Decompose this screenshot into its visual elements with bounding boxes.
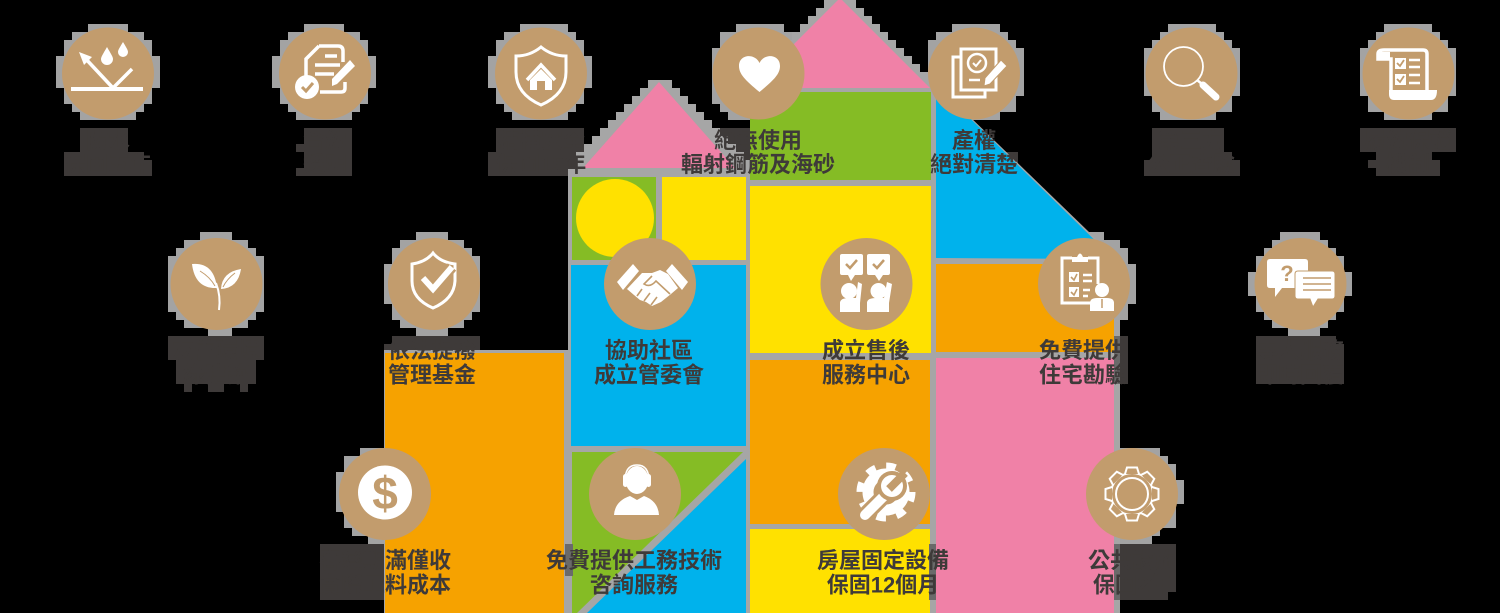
text backing blocks on the dark background	[64, 128, 1456, 600]
icon: headset agent	[614, 465, 659, 515]
caption: structure warranty: 保固15年	[496, 152, 586, 177]
dimmed text shadows in mortar gaps	[565, 336, 1120, 600]
caption: home inspection: 免費提供	[1039, 338, 1127, 363]
caption: inspection: 公正查驗	[1147, 152, 1235, 177]
icon: handshake	[617, 264, 688, 306]
caption: engineering consulting: 咨詢服務	[590, 572, 678, 598]
caption: waterproofing: 保固五年	[64, 152, 152, 177]
tan icon discs	[62, 28, 1454, 540]
caption: contract: 合約	[303, 128, 347, 153]
caption: home inspection: 住宅勘驗	[1039, 362, 1127, 388]
caption: performance guarantee: 履約保證	[1364, 128, 1452, 153]
blue triangle block	[587, 459, 746, 613]
icon: dollar coin	[358, 466, 412, 520]
icon: water repellent surface	[71, 42, 143, 91]
icon: question and answer bubbles: ?	[1280, 261, 1294, 286]
icon halos: pixelated gray fringes around circles	[56, 24, 1456, 544]
icon: outlined gear	[1106, 468, 1158, 520]
house gray mortar underlay	[384, 0, 1120, 613]
house building blocks	[384, 0, 1120, 613]
caption: consultation: 專人服務	[1256, 338, 1344, 363]
yellow center block	[750, 186, 931, 353]
left orange block	[385, 353, 564, 613]
caption: clear property rights: 產權	[952, 128, 996, 153]
caption: material cost: 實際工料成本	[319, 572, 451, 598]
icon: heart	[739, 56, 780, 92]
green triangle block	[572, 452, 743, 613]
caption: public facilities warranty: 保固2年	[1093, 572, 1171, 598]
caption: structure warranty: 結構安全	[497, 128, 585, 153]
yellow bottom block	[750, 529, 930, 613]
caption: green building: 友善環境	[172, 338, 260, 363]
pink right block	[936, 358, 1114, 613]
caption: fixtures warranty: 保固12個月	[827, 572, 939, 598]
large pink roof	[750, 0, 930, 88]
orange center block	[750, 360, 930, 524]
caption: engineering consulting: 免費提供工務技術	[546, 548, 722, 573]
caption: waterproofing: 防水	[86, 128, 130, 153]
caption: management fund: 依法提撥	[388, 338, 476, 363]
blue sloped block	[936, 85, 1114, 259]
caption: after-sales service center: 成立售後	[822, 338, 910, 363]
caption: clear property rights: 絕對清楚	[930, 152, 1018, 177]
caption: fixtures warranty: 房屋固定設備	[817, 548, 949, 573]
captions	[64, 128, 1452, 598]
icon: clipboard with person	[1062, 254, 1114, 311]
orange right block	[936, 264, 1114, 352]
caption: community committee: 成立管委會	[594, 362, 704, 388]
green square with yellow circle	[572, 177, 656, 260]
icon: dollar coin: $	[372, 467, 398, 519]
caption: after-sales service center: 服務中心	[822, 362, 910, 388]
green band under roof	[750, 92, 931, 180]
caption: public facilities warranty: 公共設施	[1088, 548, 1176, 573]
icon: shield with house	[516, 47, 566, 105]
caption: inspection: 第三方	[1158, 128, 1224, 153]
yellow square	[662, 177, 746, 260]
icon: shield with check	[412, 253, 455, 308]
caption: green building: 綠建築	[183, 362, 249, 388]
icon: magnifier	[1164, 47, 1216, 97]
caption: no radiation steel or sea sand: 輻射鋼筋及海砂	[681, 152, 835, 177]
caption: material cost: 客變期滿僅收	[319, 548, 451, 573]
icon: gear with wrench	[860, 466, 912, 518]
blue tower block	[571, 265, 746, 446]
caption: management fund: 管理基金	[388, 362, 476, 388]
caption: performance guarantee: 機制	[1386, 152, 1430, 177]
icon: question and answer bubbles	[1267, 259, 1335, 307]
caption: contract: 透明	[303, 152, 347, 177]
caption: no radiation steel or sea sand: 絕無使用	[714, 128, 802, 153]
icon: documents with check	[953, 49, 1007, 97]
icon: people with approval bubbles	[840, 254, 892, 312]
icon: checklist scroll	[1378, 50, 1437, 100]
caption: community committee: 協助社區	[605, 338, 693, 363]
icon: contract with check	[295, 46, 355, 99]
icon: sprout	[192, 264, 241, 310]
caption: consultation: 即時回覆	[1256, 362, 1344, 388]
small pink roof	[583, 82, 735, 168]
